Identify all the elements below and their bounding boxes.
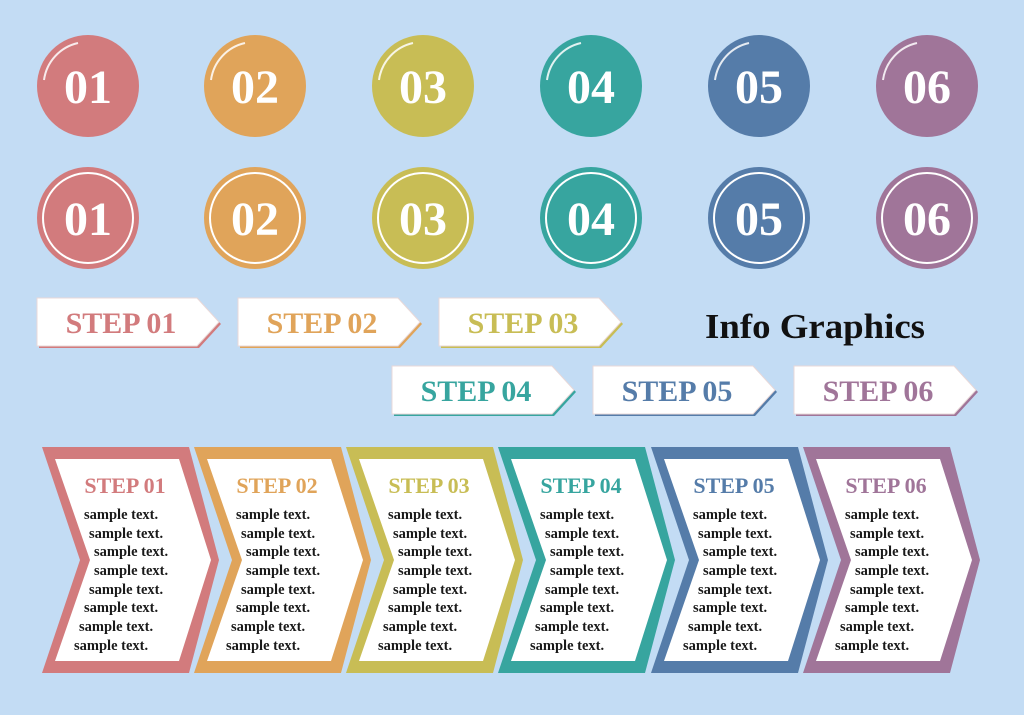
step tag 05: STEP 05 [622, 375, 732, 408]
glossy circle row [37, 35, 978, 137]
step tag 01: STEP 01 [66, 307, 176, 340]
chevron 04 [498, 447, 675, 673]
chevron 05: sample text. [698, 526, 772, 542]
chevron 03: sample text. [393, 526, 467, 542]
chevron 02: sample text. [236, 600, 310, 616]
chevron 01: sample text. [89, 582, 163, 598]
chevron 04: sample text. [540, 600, 614, 616]
circle 04 ringed: 04 [567, 193, 615, 246]
chevron 05: sample text. [683, 638, 757, 654]
chevron 05: sample text. [703, 563, 777, 579]
step tag 02 [238, 298, 422, 348]
chevron 01: sample text. [94, 563, 168, 579]
circle 06 glossy: 06 [903, 61, 951, 114]
chevron 01: sample text. [89, 526, 163, 542]
circle 04 ringed [540, 167, 642, 269]
chevron 06: sample text. [850, 526, 924, 542]
chevron 03: sample text. [388, 600, 462, 616]
circle 01 ringed [37, 167, 139, 269]
chevron 05: sample text. [698, 582, 772, 598]
chevron 06: sample text. [835, 638, 909, 654]
chevron 03: sample text. [378, 638, 452, 654]
chevron 06: STEP 06 [845, 473, 927, 498]
step tag 06: STEP 06 [823, 375, 933, 408]
chevron 05: sample text. [693, 600, 767, 616]
chevron 03: sample text. [383, 619, 457, 635]
circle 04 glossy: 04 [567, 61, 615, 114]
chevron 01: sample text. [79, 619, 153, 635]
circle 05 glossy: 05 [735, 61, 783, 114]
chevron 04: sample text. [535, 619, 609, 635]
chevron 05 [651, 447, 828, 673]
chevron 06: sample text. [840, 619, 914, 635]
chevron 03: STEP 03 [388, 473, 470, 498]
chevron 04: sample text. [540, 507, 614, 523]
chevron 03: sample text. [393, 582, 467, 598]
chevron 04: sample text. [545, 582, 619, 598]
chevron 02: sample text. [246, 544, 320, 560]
chevron 02: sample text. [226, 638, 300, 654]
step tag 04 [392, 366, 576, 416]
circle 02 glossy [204, 35, 306, 137]
chevron 02: STEP 02 [236, 473, 318, 498]
circle 05 ringed [708, 167, 810, 269]
chevron 02 [194, 447, 371, 673]
circle 02 glossy: 02 [231, 61, 279, 114]
chevron 03: sample text. [398, 563, 472, 579]
step tag 02: STEP 02 [267, 307, 377, 340]
chevron 06: sample text. [845, 507, 919, 523]
chevron 04: sample text. [550, 563, 624, 579]
chevron 06 [803, 447, 980, 673]
circle 01 glossy [37, 35, 139, 137]
chevron 05: STEP 05 [693, 473, 775, 498]
chevron 02: sample text. [241, 526, 315, 542]
chevron 04: sample text. [550, 544, 624, 560]
step tag 05 [593, 366, 777, 416]
circle 04 glossy [540, 35, 642, 137]
chevron 04: sample text. [545, 526, 619, 542]
step tag 03 [439, 298, 623, 348]
chevron 06: sample text. [845, 600, 919, 616]
circle 03 glossy [372, 35, 474, 137]
chevron 04: sample text. [530, 638, 604, 654]
circle 02 ringed [204, 167, 306, 269]
chevron 05: sample text. [693, 507, 767, 523]
chevron 02: sample text. [246, 563, 320, 579]
circle 05 glossy [708, 35, 810, 137]
chevron 03 [346, 447, 523, 673]
circle 03 ringed: 03 [399, 193, 447, 246]
circle 01 glossy: 01 [64, 61, 112, 114]
step tag 01 [37, 298, 221, 348]
ringed circle row [37, 167, 978, 269]
chevron 04: STEP 04 [540, 473, 622, 498]
circle 06 ringed: 06 [903, 193, 951, 246]
step tag 03: STEP 03 [468, 307, 578, 340]
chevron 01: STEP 01 [84, 473, 166, 498]
circle 03 glossy: 03 [399, 61, 447, 114]
chevron 01: sample text. [84, 600, 158, 616]
chevron 05: sample text. [688, 619, 762, 635]
chevron 01: sample text. [74, 638, 148, 654]
circle 03 ringed [372, 167, 474, 269]
chevron 03: sample text. [388, 507, 462, 523]
chevron 02: sample text. [236, 507, 310, 523]
chevron 02: sample text. [231, 619, 305, 635]
chevron 01: sample text. [94, 544, 168, 560]
chevron 01: sample text. [84, 507, 158, 523]
title: Info Graphics [705, 307, 925, 346]
step tag 06 [794, 366, 978, 416]
chevron 06: sample text. [855, 563, 929, 579]
chevron 02: sample text. [241, 582, 315, 598]
chevron 01 [42, 447, 219, 673]
circle 06 glossy [876, 35, 978, 137]
step tag 04: STEP 04 [421, 375, 531, 408]
chevron 05: sample text. [703, 544, 777, 560]
chevron 06: sample text. [850, 582, 924, 598]
circle 02 ringed: 02 [231, 193, 279, 246]
chevron 06: sample text. [855, 544, 929, 560]
chevron 03: sample text. [398, 544, 472, 560]
circle 06 ringed [876, 167, 978, 269]
circle 01 ringed: 01 [64, 193, 112, 246]
circle 05 ringed: 05 [735, 193, 783, 246]
